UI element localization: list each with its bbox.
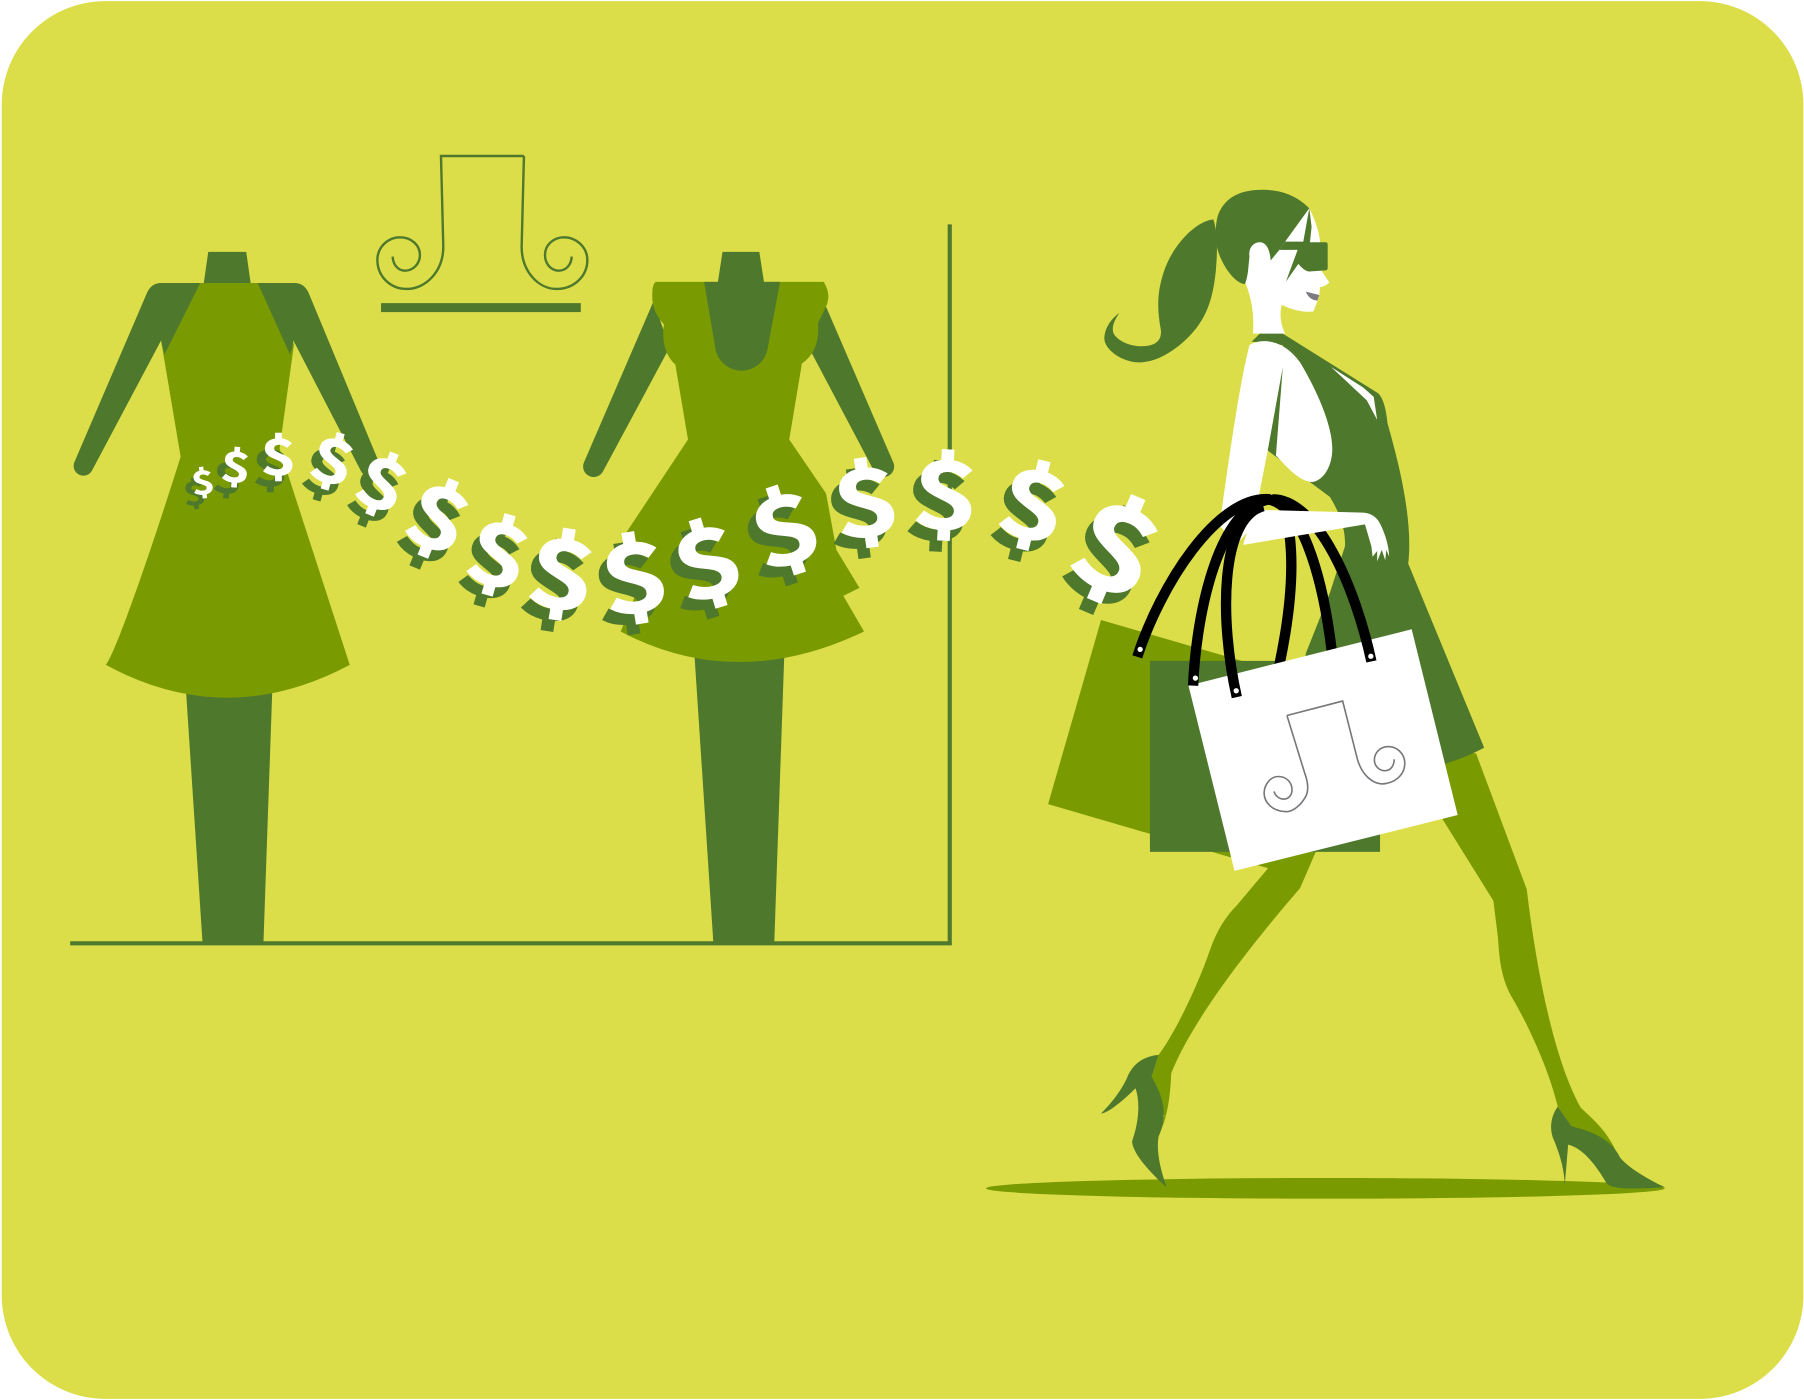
handle rivets	[1138, 647, 1373, 693]
back handles	[1263, 499, 1332, 665]
dollar 1: $	[180, 467, 209, 516]
dollar 12: $	[815, 436, 899, 578]
front shoe	[1551, 1107, 1665, 1189]
dollar 3: $	[261, 418, 296, 489]
middle mannequin with dress	[583, 252, 894, 942]
woman shopper	[986, 190, 1665, 1199]
dollar 1	[180, 456, 217, 516]
dollar 5: $	[343, 424, 425, 534]
forearm and hand	[1243, 510, 1389, 561]
floor and wall lines	[70, 224, 950, 943]
mouth	[1306, 292, 1319, 301]
dollar 1: $	[188, 456, 217, 505]
dollar 10: $	[654, 482, 758, 631]
dollar 14: $	[986, 424, 1084, 572]
back shoe	[1101, 1055, 1167, 1187]
dollar 2: $	[210, 444, 245, 507]
dollar 9: $	[582, 510, 670, 655]
upper arm	[1221, 341, 1332, 544]
dollar 3: $	[253, 429, 288, 500]
neck and face	[1231, 201, 1329, 334]
dollar 13: $	[909, 419, 983, 557]
dollar 8: $	[511, 506, 599, 652]
store logo	[377, 156, 587, 312]
front handles	[1137, 499, 1270, 697]
dollar 13: $	[901, 429, 975, 568]
dollar 9: $	[590, 499, 678, 644]
dollar 7: $	[446, 493, 538, 628]
dollar 15: $	[1049, 448, 1190, 634]
ground shadow	[986, 1178, 1665, 1199]
dollar 14: $	[978, 435, 1076, 583]
dress highlight	[1331, 367, 1377, 420]
back leg	[1152, 846, 1318, 1137]
dollar 2: $	[218, 433, 253, 496]
dollar 8: $	[519, 496, 607, 641]
dollar 10: $	[646, 493, 750, 642]
sunglasses and hair strand	[1279, 208, 1328, 282]
dollar 6: $	[382, 455, 483, 591]
trail of dollar signs	[180, 411, 1190, 655]
white tote bag	[1188, 629, 1458, 871]
ponytail	[1104, 219, 1217, 362]
dollar 11: $	[723, 459, 828, 609]
middle bag	[1150, 661, 1380, 852]
handle right strand	[1272, 499, 1371, 661]
dollar 4: $	[293, 422, 358, 516]
dollar 5: $	[335, 435, 417, 545]
front leg	[1438, 748, 1618, 1155]
dollar 6: $	[390, 445, 491, 580]
dollar 7: $	[454, 482, 547, 617]
bag logo	[1264, 701, 1405, 812]
left mannequin with dress	[74, 252, 380, 942]
dollar 12: $	[823, 425, 907, 567]
dollar 15: $	[1041, 459, 1182, 645]
dollar 11: $	[731, 448, 836, 598]
dress	[1252, 331, 1484, 782]
dollar 4: $	[301, 411, 366, 505]
back bag	[1048, 620, 1323, 869]
hair cap	[1216, 190, 1309, 284]
dollar 2	[210, 433, 253, 507]
